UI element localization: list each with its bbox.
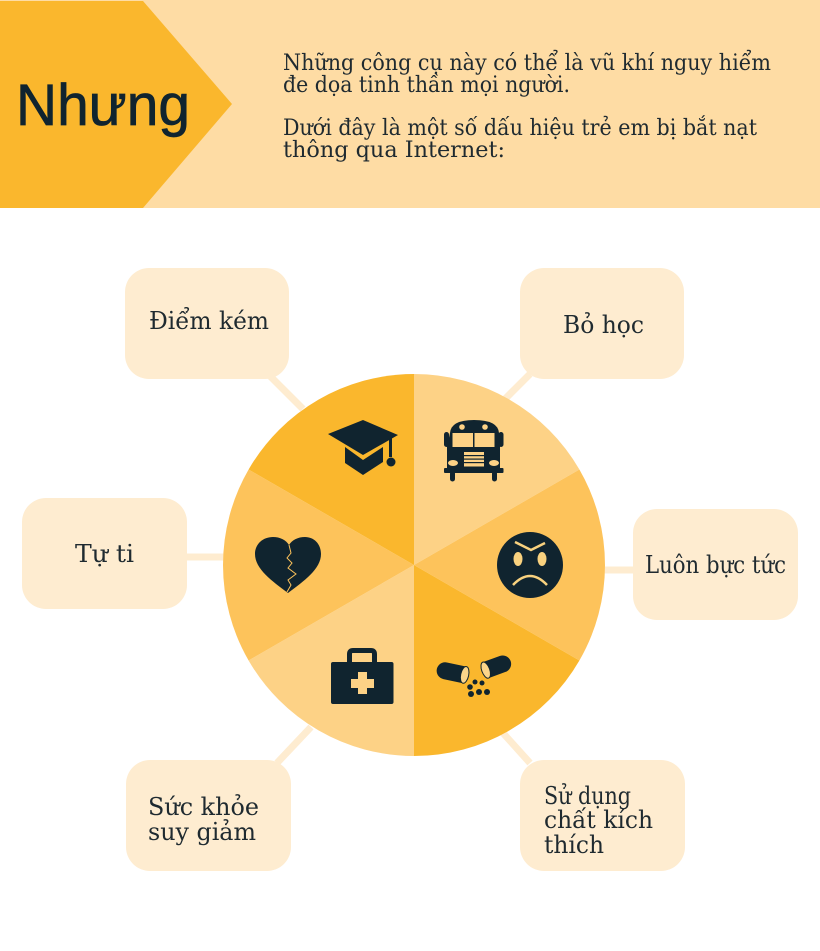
panel: Sử dụng chất kích thích: chất kích — [544, 806, 653, 834]
header banner — [0, 0, 820, 208]
icon: pill capsule — [435, 653, 514, 697]
panel: Sử dụng chất kích thích: thích — [544, 831, 604, 859]
icon: graduation cap — [328, 420, 398, 475]
panel: Sức khỏe suy giảm: Sức khỏe — [148, 793, 259, 821]
panel: Sức khỏe suy giảm: suy giảm — [148, 818, 256, 846]
intro text — [283, 48, 771, 163]
panel: Sức khỏe suy giảm — [126, 760, 291, 871]
intro text: đe dọa tinh thần mọi người. — [283, 72, 570, 98]
icon: broken heart — [255, 537, 321, 593]
icon: medical case — [331, 650, 394, 704]
panel: Sử dụng chất kích thích: Sử dụng — [544, 782, 631, 810]
panel: Bỏ học: Bỏ học — [563, 311, 644, 339]
icon: school bus — [444, 420, 504, 482]
intro text: Những công cụ này có thể là vũ khí nguy hiểm — [283, 48, 771, 76]
header arrow — [0, 1, 232, 208]
panel: Điểm kém: Điểm kém — [149, 306, 269, 335]
intro text: thông qua Internet: — [283, 137, 505, 163]
icon: angry face — [497, 532, 563, 598]
panel: Sử dụng chất kích thích — [520, 760, 685, 871]
panel: Luôn bực tức — [633, 509, 798, 620]
panel: Điểm kém — [125, 268, 289, 379]
title: Nhưng — [16, 73, 190, 138]
connector lines — [185, 374, 636, 763]
panel: Bỏ học — [520, 268, 684, 379]
panel: Tự ti: Tự ti — [75, 540, 134, 568]
intro text: Dưới đây là một số dấu hiệu trẻ em bị bắt nạt — [283, 115, 757, 141]
panel: Luôn bực tức: Luôn bực tức — [645, 551, 786, 579]
pie wheel — [223, 374, 605, 756]
panel: Tự ti — [22, 498, 187, 609]
